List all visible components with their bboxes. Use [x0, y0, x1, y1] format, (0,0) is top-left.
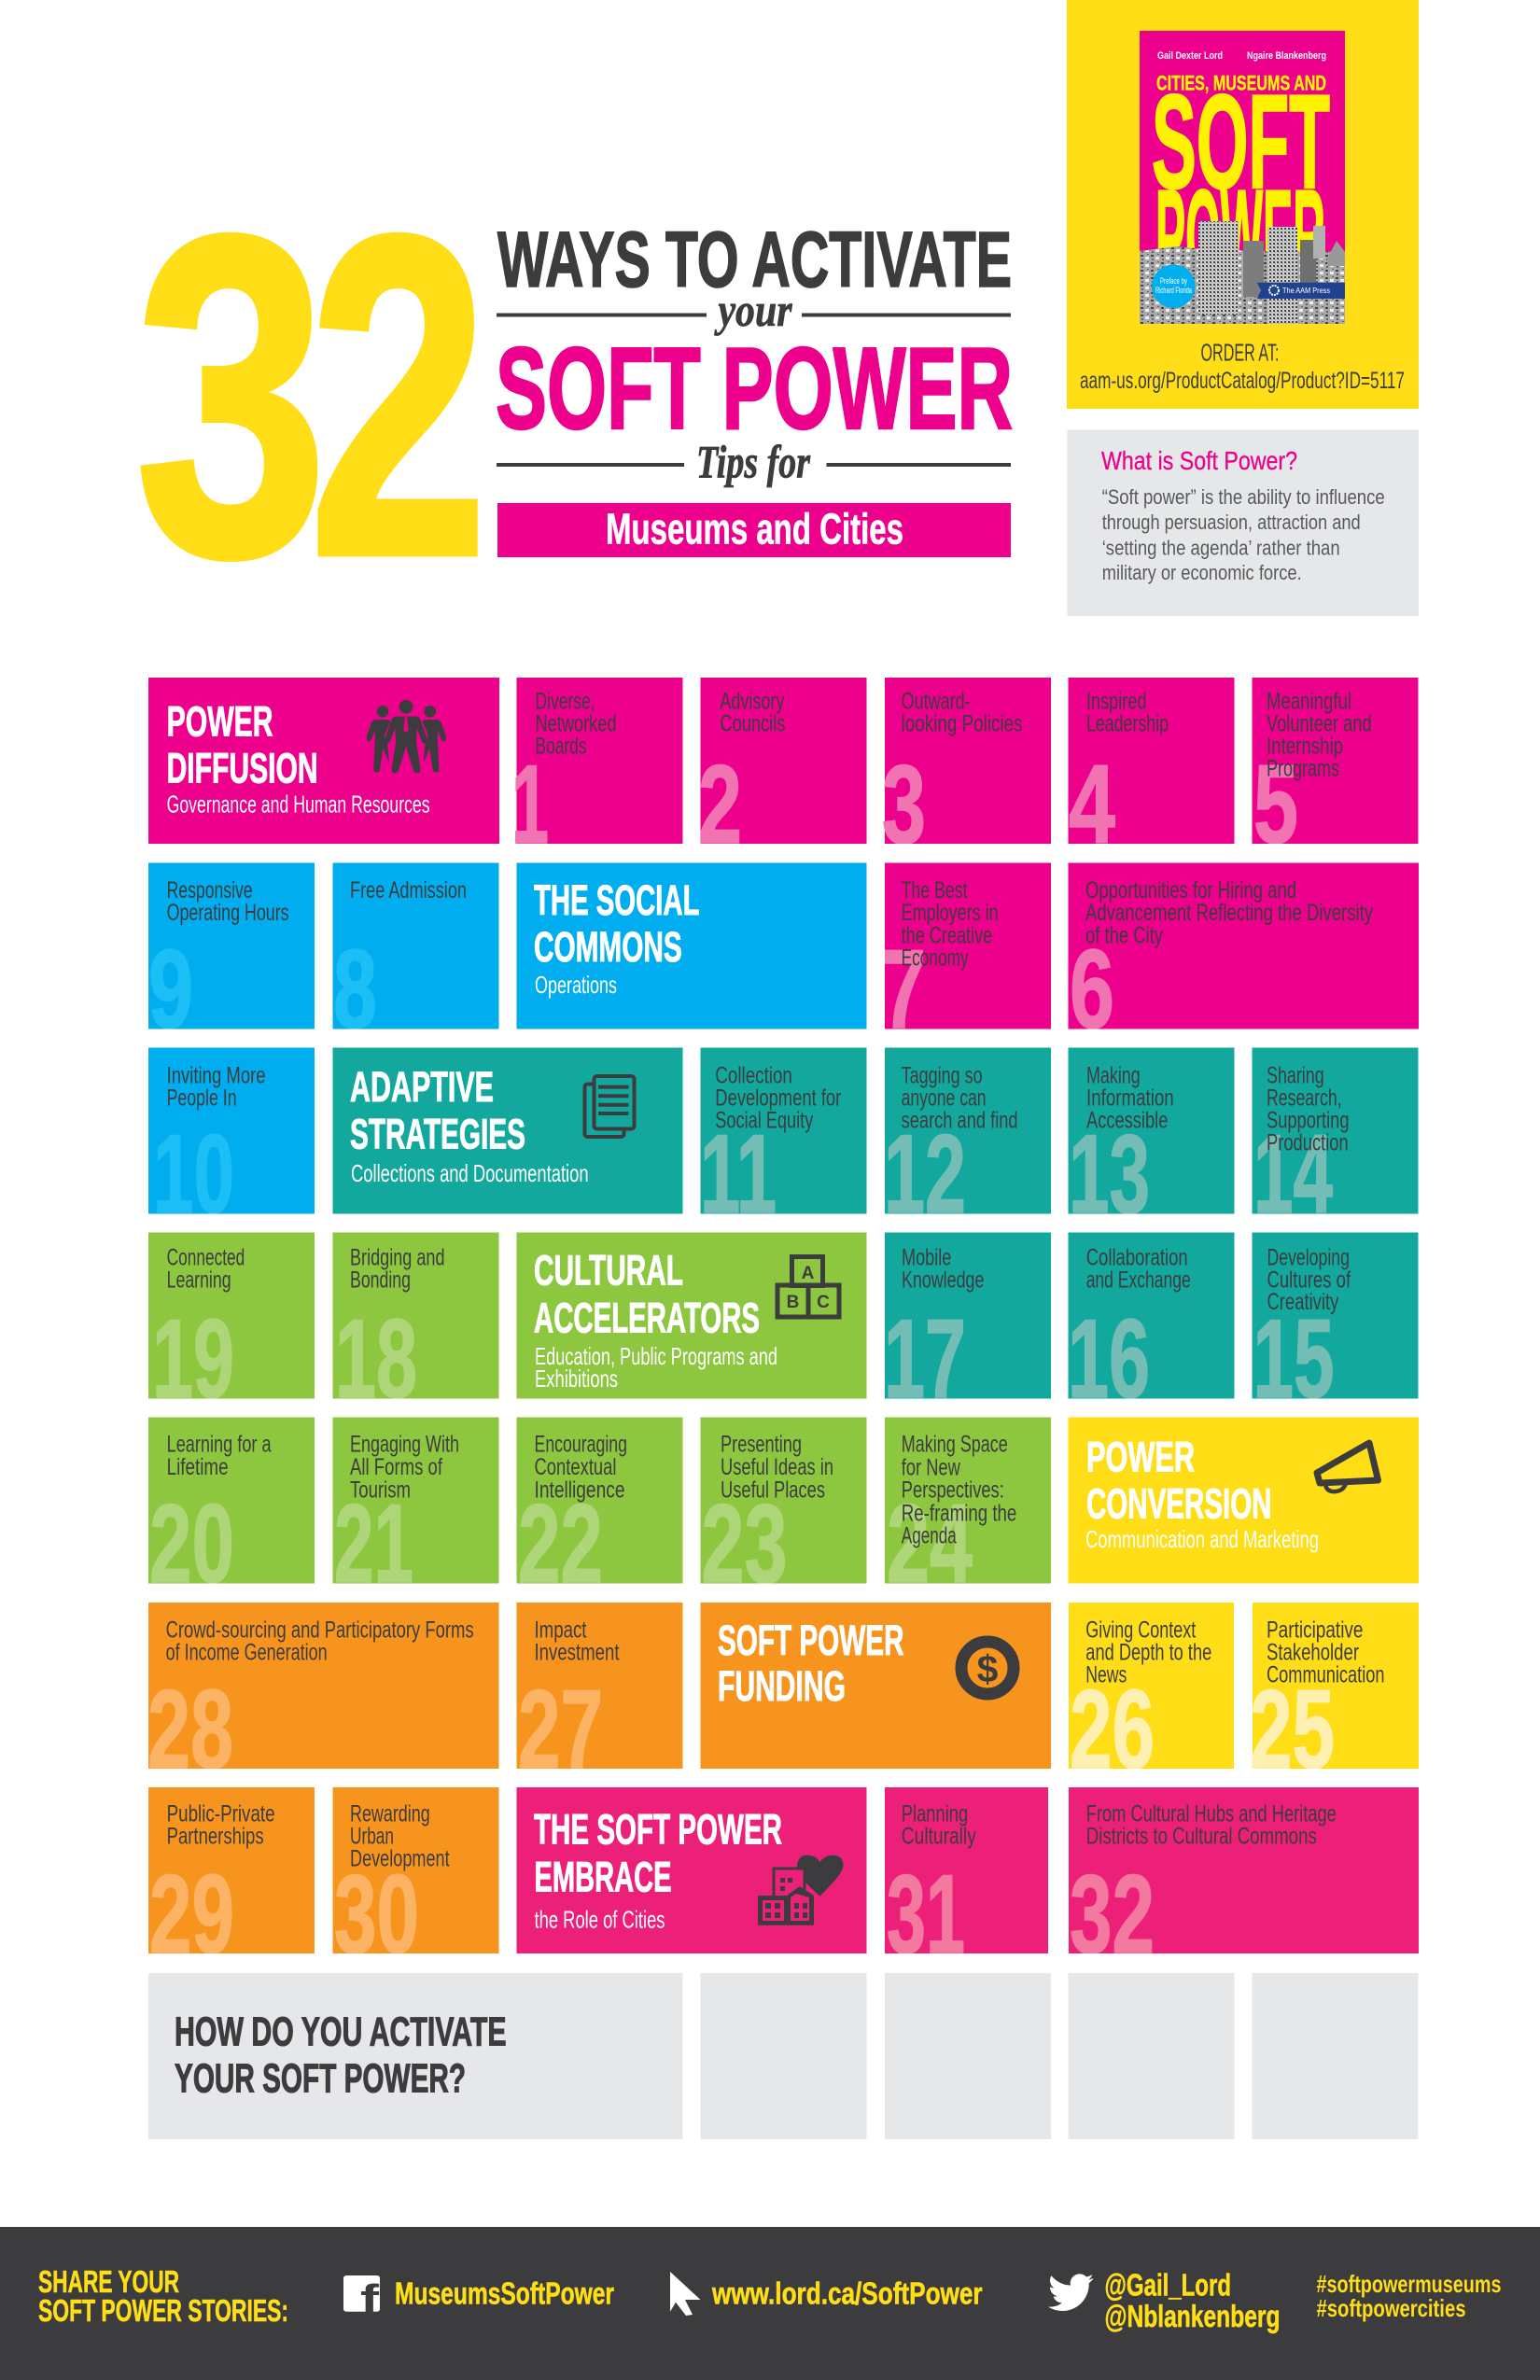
- tip text: [1267, 1062, 1350, 1155]
- tip text: People In: [167, 1085, 237, 1111]
- tip text: of Income Generation: [166, 1639, 328, 1665]
- tile 7: best employers: [885, 862, 1051, 1029]
- tile 17: mobile knowledge: [885, 1232, 1051, 1398]
- facebook handle: MuseumsSoftPower: [395, 2275, 614, 2311]
- panel: the soft power embrace heading: [517, 1787, 866, 1953]
- tile 10: inviting more people in: [148, 1047, 315, 1213]
- tip text: Internship: [1267, 733, 1343, 759]
- panel: the soft power embrace heading: EMBRACE: [534, 1854, 672, 1900]
- tip text: Lifetime: [167, 1454, 229, 1480]
- tip text: Bridging and: [350, 1244, 444, 1270]
- tip text: the Creative: [902, 922, 992, 948]
- share your soft power stories: SOFT POWER STORIES:: [38, 2293, 288, 2328]
- tip text: Meaningful: [1267, 688, 1351, 714]
- panel: adaptive strategies heading: STRATEGIES: [350, 1111, 525, 1157]
- tip text: Boards: [536, 733, 586, 759]
- tip text: Social Equity: [715, 1107, 814, 1133]
- tip text: [1085, 1617, 1211, 1687]
- tip text: [534, 1617, 620, 1665]
- tip text: Economy: [902, 945, 969, 971]
- number 1: 1: [511, 742, 549, 867]
- tip text: [1267, 1617, 1385, 1687]
- tip text: Giving Context: [1085, 1617, 1196, 1643]
- heading: what is soft power: What is Soft Power?: [1101, 446, 1297, 475]
- book cover: Ngaire Blankenberg: [1247, 50, 1326, 62]
- tip text: [902, 688, 1023, 736]
- tip text: [166, 1617, 474, 1665]
- order text: [1080, 338, 1405, 394]
- tip text: Urban: [350, 1823, 394, 1849]
- tile 22: encouraging contextual intelligence: [517, 1417, 683, 1606]
- icon: twitter: [1048, 2274, 1094, 2311]
- twitter handles: [1105, 2268, 1281, 2333]
- tip text: All Forms of: [350, 1454, 442, 1480]
- panel: cultural accelerators heading: Education, Public Programs and: [535, 1342, 777, 1370]
- number 20: 20: [149, 1481, 234, 1606]
- panel: cultural accelerators heading: Exhibitions: [535, 1365, 618, 1393]
- number 4: 4: [1069, 742, 1115, 867]
- tip text: Useful Ideas in: [721, 1454, 833, 1480]
- tip text: [167, 877, 289, 926]
- tip text: for New: [902, 1454, 960, 1480]
- tile 13: making information accessible: [1068, 1047, 1234, 1213]
- tip text: [350, 1431, 459, 1503]
- definition text: [1102, 485, 1385, 584]
- order text: aam-us.org/ProductCatalog/Product?ID=5117: [1080, 368, 1405, 394]
- number 22: 22: [518, 1481, 603, 1606]
- tip text: [902, 1244, 984, 1293]
- tip text: [1267, 688, 1372, 781]
- hashtags: [1316, 2270, 1501, 2322]
- hashtags: #softpowercities: [1316, 2294, 1465, 2322]
- panel: the social commons heading: COMMONS: [534, 923, 682, 971]
- icon: facebook: [343, 2275, 380, 2322]
- number 11: 11: [700, 1112, 777, 1237]
- tip text: Intelligence: [534, 1477, 625, 1503]
- tip text: Collaboration: [1086, 1244, 1188, 1270]
- tip text: News: [1085, 1661, 1127, 1687]
- tip text: Learning for a: [167, 1431, 272, 1457]
- panel: adaptive strategies heading: Collections and Documentation: [351, 1159, 589, 1187]
- tip text: Making: [1086, 1062, 1141, 1088]
- icon: dollar coin: [961, 1642, 1014, 1694]
- panel: how do you activate: [148, 1973, 683, 2139]
- tile 20: learning for a lifetime: [148, 1417, 315, 1606]
- number 29: 29: [149, 1852, 234, 1977]
- tip text: Crowd-sourcing and Participatory Forms: [166, 1617, 474, 1643]
- tile 26: giving context: [1069, 1603, 1234, 1792]
- tip text: [167, 1244, 245, 1293]
- tip text: [536, 688, 616, 759]
- panel: adaptive strategies heading: [332, 1047, 683, 1213]
- number 2: 2: [698, 742, 742, 867]
- tip text: Learning: [167, 1267, 231, 1293]
- tip text: Opportunities for Hiring and: [1085, 877, 1296, 903]
- panel: book order: [1067, 0, 1419, 409]
- tip text: [1086, 1062, 1174, 1133]
- script word: your: your: [714, 284, 792, 336]
- tip text: Councils: [720, 710, 785, 736]
- icon: abc blocks: B: [787, 1293, 799, 1312]
- tip text: Impact: [534, 1617, 587, 1643]
- tip text: [350, 1244, 444, 1293]
- share your soft power stories: [38, 2264, 288, 2328]
- number 26: 26: [1070, 1667, 1155, 1792]
- icon: people: [367, 700, 446, 773]
- tile 9: responsive operating hours: [148, 862, 315, 1029]
- book cover: SOFT: [1152, 68, 1330, 217]
- panel: the social commons heading: Operations: [535, 971, 617, 999]
- number 14: 14: [1253, 1112, 1333, 1237]
- tip text: [1086, 1800, 1337, 1849]
- tip text: Supporting: [1267, 1107, 1350, 1133]
- number 7: 7: [882, 927, 926, 1052]
- panel: cultural accelerators heading: CULTURAL: [534, 1247, 683, 1294]
- panel: cultural accelerators heading: [517, 1232, 866, 1398]
- tip text: Perspectives:: [902, 1477, 1004, 1503]
- tip text: Planning: [902, 1800, 968, 1827]
- number 3: 3: [882, 742, 926, 867]
- tip text: The Best: [902, 877, 968, 903]
- tip text: [902, 1062, 1018, 1133]
- tip text: Bonding: [350, 1267, 411, 1293]
- panel: cultural accelerators heading: ACCELERATORS: [534, 1294, 760, 1342]
- icon: megaphone: [1317, 1443, 1378, 1491]
- icon: documents: [584, 1076, 635, 1137]
- empty grey tiles: [700, 1973, 1419, 2139]
- panel: power diffusion heading: Governance and Human Resources: [167, 790, 430, 818]
- tile 31: planning culturally: [885, 1787, 1048, 1977]
- panel: soft power funding heading: FUNDING: [718, 1662, 846, 1710]
- tile 23: presenting useful ideas: [700, 1417, 866, 1606]
- icon: cursor: [670, 2272, 700, 2316]
- tile 4: inspired leadership: [1068, 678, 1234, 844]
- tile 2: advisory councils: [700, 678, 866, 844]
- tip text: Culturally: [902, 1823, 976, 1849]
- tip text: Accessible: [1086, 1107, 1168, 1133]
- book cover: Richard Florida: [1155, 286, 1192, 295]
- tip text: [1086, 1244, 1191, 1293]
- tip text: Creativity: [1267, 1289, 1339, 1315]
- definition text: military or economic force.: [1102, 561, 1302, 584]
- icon: abc blocks: A: [802, 1264, 815, 1283]
- title: ways to activate: WAYS TO ACTIVATE: [497, 216, 1012, 303]
- title block: [496, 216, 1013, 557]
- tile 1: diverse networked boards: [515, 678, 683, 844]
- tip text: Information: [1086, 1085, 1174, 1111]
- tip text: [902, 1800, 976, 1849]
- definition text: “Soft power” is the ability to influence: [1102, 485, 1385, 509]
- tip text: Public-Private: [167, 1800, 275, 1827]
- tip text: Inviting More: [167, 1062, 266, 1088]
- big number 32: 3: [135, 142, 328, 651]
- tile 27: impact investment: [517, 1603, 683, 1792]
- tip text: Investment: [534, 1639, 620, 1665]
- tip text: Employers in: [902, 900, 999, 926]
- panel: power diffusion heading: POWER: [167, 698, 273, 745]
- website: www.lord.ca/SoftPower: [711, 2275, 983, 2311]
- tip text: Inspired: [1086, 688, 1146, 714]
- tile 3: outward-looking policies: [883, 678, 1051, 844]
- order text: ORDER AT:: [1200, 338, 1279, 366]
- tip text: Leadership: [1086, 710, 1169, 736]
- definition text: through persuasion, attraction and: [1102, 511, 1361, 534]
- twitter handles: @Gail_Lord: [1105, 2268, 1231, 2302]
- tip text: Contextual: [534, 1454, 616, 1480]
- tip text: Volunteer and: [1267, 710, 1372, 736]
- number 12: 12: [884, 1112, 966, 1237]
- panel: the soft power embrace heading: the Role of Cities: [534, 1906, 665, 1934]
- tile 29: public-private partnerships: [148, 1787, 315, 1977]
- tile 32: cultural hubs: [1069, 1787, 1419, 1977]
- number 19: 19: [152, 1296, 234, 1421]
- title: soft power: SOFT POWER: [496, 325, 1013, 454]
- tip text: Research,: [1267, 1085, 1342, 1111]
- number 8: 8: [333, 927, 377, 1052]
- tip text: Sharing: [1267, 1062, 1324, 1088]
- panel: power conversion heading: POWER: [1086, 1434, 1195, 1480]
- number 30: 30: [334, 1852, 419, 1977]
- tip text: Developing: [1267, 1244, 1350, 1270]
- tip text: Presenting: [721, 1431, 802, 1457]
- number 9: 9: [148, 927, 193, 1052]
- number 6: 6: [1070, 927, 1114, 1052]
- subtitle banner: museums and cities: [497, 503, 1011, 557]
- tip text: [350, 1800, 450, 1871]
- tip text: [721, 1431, 833, 1503]
- number 21: 21: [334, 1481, 413, 1606]
- tip text: looking Policies: [902, 710, 1023, 736]
- tile 16: collaboration and exchange: [1068, 1232, 1234, 1398]
- book cover: Gail Dexter Lord: [1157, 50, 1223, 62]
- number 31: 31: [887, 1852, 965, 1977]
- icon: facebook: f: [360, 2276, 379, 2322]
- footer bar: [0, 2227, 1540, 2380]
- tile 12: tagging: [885, 1047, 1051, 1213]
- tip text: of the City: [1085, 922, 1163, 948]
- icon: city and heart: [758, 1855, 844, 1925]
- number 10: 10: [153, 1112, 234, 1237]
- tip text: Useful Places: [721, 1477, 825, 1503]
- tip text: Development: [350, 1845, 450, 1871]
- number 23: 23: [702, 1481, 788, 1606]
- tile 8: free admission: [332, 862, 498, 1029]
- tip text: Engaging With: [350, 1431, 459, 1457]
- tip text: Tourism: [350, 1477, 411, 1503]
- tip text: [902, 877, 999, 971]
- number 15: 15: [1253, 1296, 1335, 1421]
- tip text: Participative: [1267, 1617, 1363, 1643]
- tile 19: connected learning: [148, 1232, 315, 1398]
- tip text: Rewarding: [350, 1800, 430, 1827]
- tip text: Collection: [715, 1062, 792, 1088]
- number 16: 16: [1068, 1296, 1150, 1421]
- panel: power conversion heading: [1068, 1417, 1419, 1583]
- tip text: [167, 1800, 275, 1849]
- tip text: Programs: [1267, 755, 1339, 781]
- tip text: Responsive: [167, 877, 253, 903]
- tip text: Re-framing the: [902, 1500, 1016, 1526]
- number 5: 5: [1253, 742, 1298, 867]
- tip text: Cultures of: [1267, 1267, 1351, 1293]
- tile 30: rewarding urban development: [332, 1787, 498, 1977]
- tip text: [1085, 877, 1373, 948]
- number 28: 28: [147, 1667, 233, 1792]
- tip text: [534, 1431, 627, 1503]
- tip text: Operating Hours: [167, 900, 289, 926]
- tip text: [902, 1431, 1016, 1548]
- tile 24: making space for new perspectives: [885, 1417, 1051, 1606]
- book cover: [1140, 31, 1345, 324]
- number 24: 24: [887, 1481, 973, 1606]
- tip text: Development for: [715, 1085, 841, 1111]
- tip text: Mobile: [902, 1244, 951, 1270]
- panel: the social commons heading: [517, 862, 866, 1029]
- tile 28: crowd-sourcing: [147, 1603, 498, 1792]
- panel: what is soft power: [1068, 429, 1419, 616]
- tile 14: sharing research: [1253, 1047, 1419, 1213]
- panel: power diffusion heading: [148, 678, 499, 844]
- number 27: 27: [518, 1667, 603, 1792]
- tip text: Tagging so: [902, 1062, 983, 1088]
- tip text: Advisory: [720, 688, 785, 714]
- panel: power conversion heading: Communication and Marketing: [1085, 1525, 1319, 1553]
- tile 25: participative stakeholder communication: [1250, 1603, 1419, 1792]
- panel: soft power funding heading: SOFT POWER: [718, 1617, 903, 1664]
- tip text: Making Space: [902, 1431, 1008, 1457]
- script words: tips for: Tips for: [696, 435, 810, 487]
- tip text: [715, 1062, 841, 1133]
- tip text: [720, 688, 785, 736]
- definition text: ‘setting the agenda’ rather than: [1102, 536, 1340, 560]
- tip text: Encouraging: [534, 1431, 627, 1457]
- book cover: The AAM Press: [1282, 286, 1330, 295]
- tip text: Knowledge: [902, 1267, 984, 1293]
- number 18: 18: [335, 1296, 417, 1421]
- panel: soft power funding heading: [700, 1603, 1051, 1769]
- tip text: From Cultural Hubs and Heritage: [1086, 1800, 1337, 1827]
- panel: adaptive strategies heading: ADAPTIVE: [350, 1063, 494, 1111]
- tip text: Communication: [1267, 1661, 1385, 1687]
- icon: abc blocks: [777, 1256, 839, 1317]
- tile 15: developing cultures of creativity: [1253, 1232, 1419, 1398]
- tile 5: meaningful volunteer and internship programs: [1253, 678, 1419, 844]
- big number 32: 2: [309, 142, 488, 651]
- icon: dollar coin: $: [977, 1647, 999, 1690]
- panel: the social commons heading: THE SOCIAL: [534, 876, 700, 924]
- tip text: search and find: [902, 1107, 1018, 1133]
- number 32: 32: [1070, 1852, 1155, 1977]
- book cover: Preface by: [1160, 276, 1187, 286]
- panel: how do you activate: YOUR SOFT POWER?: [175, 2055, 466, 2102]
- tip text: Outward-: [902, 688, 971, 714]
- tip text: and Depth to the: [1085, 1639, 1211, 1665]
- tile 21: engaging with tourism: [332, 1417, 498, 1606]
- panel: power conversion heading: CONVERSION: [1086, 1480, 1271, 1527]
- panel: how do you activate: HOW DO YOU ACTIVATE: [175, 2009, 507, 2055]
- tip text: [1267, 1244, 1351, 1315]
- tile 6: opportunities for hiring: [1068, 862, 1419, 1029]
- tip text: Partnerships: [167, 1823, 264, 1849]
- subtitle banner: museums and cities: Museums and Cities: [606, 504, 903, 553]
- panel: the soft power embrace heading: THE SOFT POWER: [534, 1805, 782, 1854]
- tile 18: bridging and bonding: [332, 1232, 498, 1398]
- tip text: and Exchange: [1086, 1267, 1191, 1293]
- tip text: Agenda: [902, 1522, 957, 1548]
- tip text: anyone can: [902, 1085, 987, 1111]
- number 13: 13: [1069, 1112, 1150, 1237]
- panel: power diffusion heading: DIFFUSION: [167, 745, 318, 791]
- tip text: Connected: [167, 1244, 245, 1270]
- tip text: Networked: [536, 710, 616, 736]
- share your soft power stories: SHARE YOUR: [38, 2264, 179, 2299]
- number 25: 25: [1250, 1667, 1335, 1792]
- number 17: 17: [884, 1296, 966, 1421]
- tip text: Stakeholder: [1267, 1639, 1359, 1665]
- tip text: [1086, 688, 1169, 736]
- tip text: Diverse,: [536, 688, 595, 714]
- icon: abc blocks: C: [817, 1293, 830, 1312]
- tip text: Production: [1267, 1129, 1349, 1155]
- tip text: [167, 1431, 272, 1480]
- tip text: Districts to Cultural Commons: [1086, 1823, 1317, 1849]
- tip text: Advancement Reflecting the Diversity: [1085, 900, 1373, 926]
- twitter handles: @Nblankenberg: [1105, 2299, 1281, 2333]
- tip text: Free Admission: [350, 877, 467, 903]
- tile 11: collection development: [700, 1047, 866, 1213]
- tip text: [167, 1062, 266, 1111]
- book cover: CITIES, MUSEUMS AND: [1156, 71, 1326, 95]
